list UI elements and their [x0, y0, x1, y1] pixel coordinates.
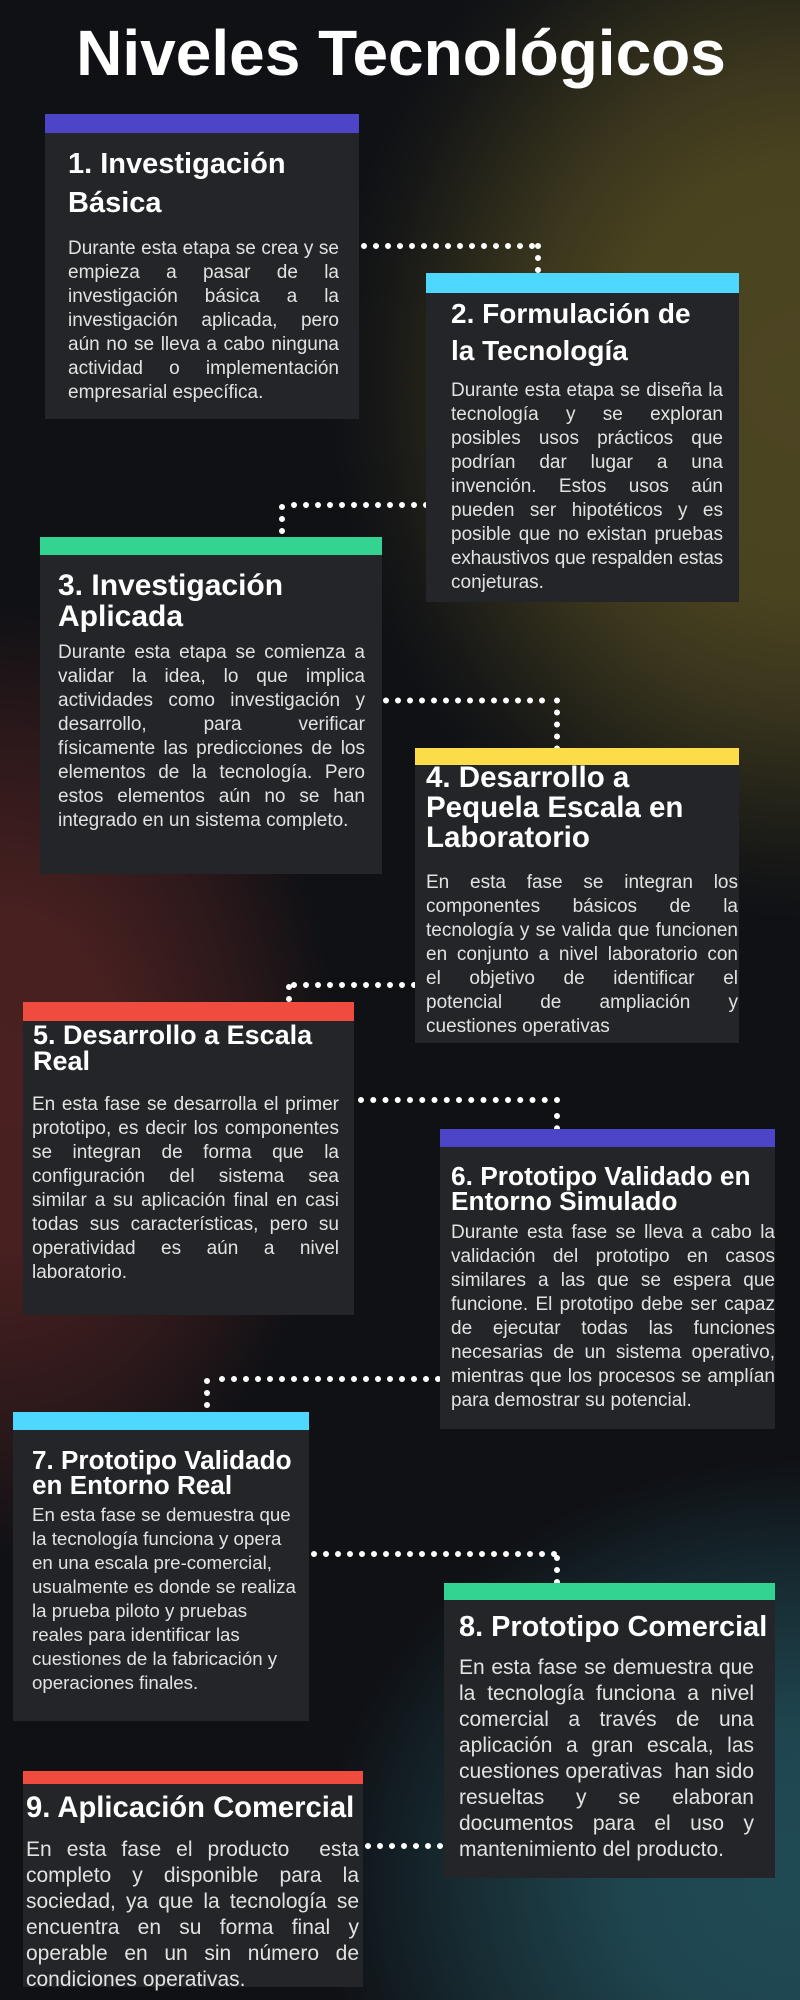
text: step 1 [68, 238, 339, 403]
colour bar: indigo [440, 1129, 775, 1147]
text: step 8: comercial a través de una [459, 1708, 754, 1731]
heading: step 7: 7. Prototipo Validado [32, 1444, 292, 1474]
heading: step 9: 9. Aplicación Comercial [26, 1792, 354, 1824]
text: step 9: encuentra en su forma final y [26, 1916, 359, 1939]
text: step 9: completo y disponible para la [26, 1864, 359, 1887]
text: step 6 [451, 1222, 775, 1410]
heading: step 2 [451, 298, 691, 366]
text: step 5 [32, 1094, 339, 1283]
heading: step 3: Aplicada [58, 600, 183, 633]
panel: step 2 [426, 273, 739, 602]
text: step 8: resueltas y se elaboran [459, 1786, 754, 1809]
text: step 3: actividades como investigación y [58, 690, 365, 710]
text: step 8: documentos para el uso y [459, 1812, 754, 1835]
text: step 1: aún no se lleva a cabo ninguna [68, 334, 339, 355]
text: step 8: aplicación a gran escala, las [459, 1734, 754, 1757]
text: step 8: cuestiones operativas han sido [459, 1760, 754, 1783]
colour bar: green [444, 1583, 775, 1600]
text: step 7: usualmente es donde se realiza [32, 1576, 296, 1597]
colour bar: cyan [426, 273, 739, 293]
text: step 3: físicamente las predicciones de los [58, 738, 365, 758]
heading: step 3: 3. Investigación [58, 569, 283, 602]
heading: step 1: 1. Investigación [68, 148, 286, 180]
text: step 3: estos elementos aún no se han [58, 786, 365, 806]
heading: step 3 [58, 569, 283, 633]
colour bar: red [23, 1002, 354, 1021]
connector: step 7 to 8 [314, 1554, 557, 1590]
text: step 5: operatividad es aún a nivel [32, 1238, 339, 1259]
heading: step 2: la Tecnología [451, 335, 628, 366]
text: step 1: investigación aplicada, pero [68, 310, 339, 331]
heading: step 4 [426, 761, 683, 854]
text: step 2: conjeturas. [451, 572, 544, 593]
heading: step 1 [68, 148, 286, 219]
connector: step 3 to 4 [386, 700, 557, 752]
text: step 3: desarrollo, para verificar [58, 714, 365, 734]
text: step 9: En esta fase el producto esta [26, 1838, 359, 1861]
text: step 6: Durante esta fase se lleva a cabo la [451, 1222, 775, 1242]
panel: step 7 [13, 1412, 309, 1721]
text: step 4: el objetivo de identificar el [426, 968, 738, 988]
text: step 2: podrían dar lugar a una [451, 452, 723, 473]
text: step 5: todas sus características, pero su [32, 1214, 339, 1235]
heading: step 5: Real [33, 1046, 90, 1076]
heading: step 5 [33, 1020, 312, 1076]
panel: step 1 [45, 114, 359, 419]
panel: step 4 [415, 748, 739, 1043]
text: step 1: empresarial específica. [68, 382, 263, 403]
text: step 9: sociedad, ya que la tecnología se [26, 1890, 359, 1913]
text: step 4: cuestiones operativas [426, 1016, 610, 1036]
text: step 5: configuración del sistema sea [32, 1166, 339, 1187]
text: step 8 [459, 1656, 754, 1861]
text: step 1: empieza a pasar de la [68, 262, 339, 283]
text: step 4: En esta fase se integran los [426, 872, 738, 892]
text: step 9: condiciones operativas. [26, 1968, 245, 1991]
text: step 2: pueden ser hipotéticos y es [451, 500, 723, 521]
heading: step 6 [451, 1160, 751, 1216]
connector: step 6 to 7 [207, 1379, 438, 1412]
text: step 6: validación del prototipo en casos [451, 1246, 775, 1266]
text: step 6: funcione. El prototipo debe ser capaz [451, 1294, 775, 1314]
heading: step 6: Entorno Simulado [451, 1186, 677, 1216]
text: step 2: posibles usos prácticos que [451, 428, 723, 449]
text: step 5: laboratorio. [32, 1262, 127, 1283]
connector: step 8 to 9 [368, 1843, 446, 1849]
title: Niveles Tecnológicos [76, 17, 726, 89]
panel: step 6 [440, 1129, 775, 1429]
text: step 5: prototipo, es decir los componentes [32, 1118, 339, 1139]
heading: step 6: 6. Prototipo Validado en [451, 1160, 751, 1190]
connector: step 5 to 6 [361, 1100, 558, 1134]
heading: step 8: 8. Prototipo Comercial [459, 1611, 767, 1643]
text: step 7: la tecnología funciona y opera [32, 1528, 281, 1549]
text: step 7 [32, 1504, 296, 1693]
heading: step 4: 4. Desarrollo a [426, 761, 629, 794]
text: step 2: posible que no existan pruebas [451, 524, 723, 545]
colour bar: indigo [45, 114, 359, 133]
text: step 7: en una escala pre-comercial, [32, 1552, 272, 1573]
connector: step 2 to 3 [282, 505, 426, 540]
text: step 1: Durante esta etapa se crea y se [68, 238, 339, 259]
text: step 6: necesarias de un sistema operativo, [451, 1342, 775, 1362]
text: step 3 [58, 642, 365, 830]
text: step 7: reales para identificar las [32, 1624, 240, 1645]
text: step 2: exhaustivos que respalden estas [451, 548, 723, 569]
heading: step 1: Básica [68, 187, 162, 219]
panel: step 3 [40, 537, 382, 874]
text: step 2: Durante esta etapa se diseña la [451, 380, 723, 401]
panel: step 9 [23, 1771, 363, 1987]
colour bar: yellow [415, 748, 739, 765]
text: step 8: la tecnología funciona a nivel [459, 1682, 754, 1705]
text: step 2: invención. Estos usos aún [451, 476, 723, 497]
text: step 4 [426, 872, 738, 1036]
heading: step 7: en Entorno Real [32, 1470, 232, 1500]
colour bar: cyan [13, 1412, 309, 1430]
text: step 6: de ejecutar todas las funciones [451, 1318, 775, 1338]
colour bar: green [40, 537, 382, 555]
text: step 4: en conjunto a nivel laboratorio con [426, 944, 738, 964]
heading: step 4: Pequela Escala en [426, 791, 683, 824]
text: step 5: similar a su aplicación final en casi [32, 1190, 339, 1211]
text: step 3: integrado en un sistema completo. [58, 810, 348, 830]
text: step 9 [26, 1838, 360, 1991]
heading: step 2: 2. Formulación de [451, 298, 691, 329]
text: step 3: validar la idea, lo que implica [58, 666, 365, 686]
text: step 5: En esta fase se desarrolla el primer [32, 1094, 339, 1115]
text: step 4: potencial de ampliación y [426, 992, 738, 1012]
text: step 3: Durante esta etapa se comienza a [58, 642, 365, 662]
text: step 7: En esta fase se demuestra que [32, 1504, 291, 1525]
text: step 9: operable en un sin número de [26, 1942, 359, 1965]
text: step 2: tecnología y se exploran [451, 404, 723, 425]
connector: step 1 to 2 [364, 246, 538, 276]
text: step 7: la prueba piloto y pruebas [32, 1600, 247, 1621]
text: step 3: elementos de la tecnología. Pero [58, 762, 365, 782]
text: step 1: actividad o implementación [68, 358, 339, 379]
text: step 1: investigación básica a la [68, 286, 339, 307]
text: step 7: operaciones finales. [32, 1672, 198, 1693]
connector: step 4 to 5 [289, 985, 414, 1010]
panel: step 8 [444, 1583, 775, 1878]
text: step 4: componentes básicos de la [426, 896, 738, 916]
text: step 6: similares a las que se espera que [451, 1270, 775, 1290]
colour bar: red [23, 1771, 363, 1784]
heading: step 7 [32, 1444, 292, 1500]
heading: step 5: 5. Desarrollo a Escala [33, 1020, 312, 1050]
text: step 8: mantenimiento del producto. [459, 1838, 724, 1861]
text: step 5: se integran de forma que la [32, 1142, 339, 1163]
panel: step 5 [23, 1002, 354, 1315]
heading: step 4: Laboratorio [426, 821, 590, 854]
text: step 8: En esta fase se demuestra que [459, 1656, 754, 1679]
text: step 6: mientras que los procesos se amplían [451, 1366, 775, 1386]
text: step 6: para demostrar su potencial. [451, 1390, 692, 1410]
text: step 4: tecnología y se valida que funcionen [426, 920, 738, 940]
text: step 2 [451, 380, 723, 593]
text: step 7: cuestiones de la fabricación y [32, 1648, 277, 1669]
